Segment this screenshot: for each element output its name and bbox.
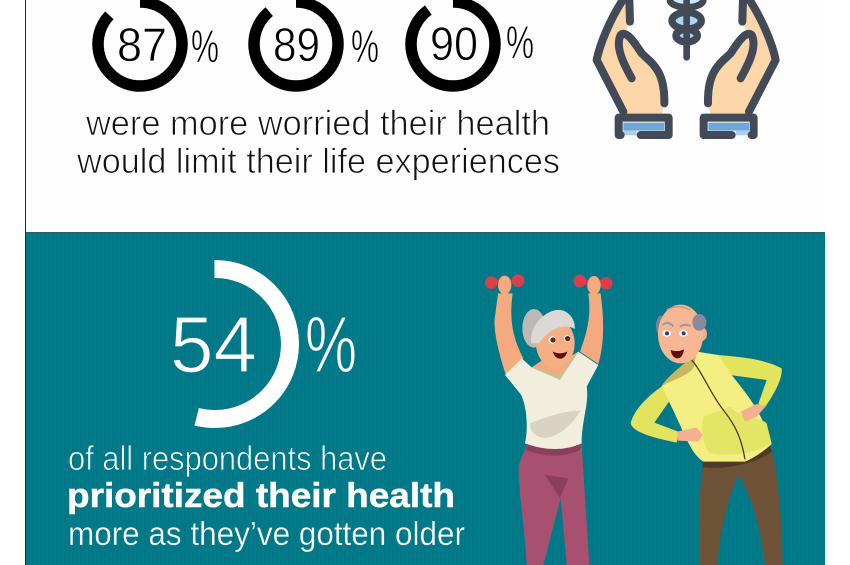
icon part: left hand [597,0,669,135]
shirt [505,352,598,449]
icon: hands protecting caduceus [597,0,776,135]
text: worried caption [76,104,560,181]
text: respondents caption: more as they’ve gotten older [68,515,465,552]
ring stat: 90 percent: % [506,16,534,68]
text: respondents caption: of all respondents have [68,440,387,478]
arms [494,293,523,375]
pants [519,445,589,565]
text: worried caption: were more worried their health [85,104,550,143]
hands [677,427,703,442]
head [656,305,707,363]
icon part: caduceus [670,0,703,57]
text: worried caption: would limit their life experiences [76,142,560,181]
ring stat: 90 percent [411,2,534,86]
neck [532,352,578,378]
ring stat: 87 percent: % [191,20,219,72]
dumbbells [485,274,613,295]
left sleeve [631,383,678,443]
ring stat: 90 percent: 90 [430,17,478,70]
ring stat: 54 percent [140,269,357,419]
ring stat: 89 percent [254,2,379,86]
text: respondents caption: prioritized their health [67,477,455,515]
ring stat: 89 percent: % [351,20,379,72]
ring stat: 54 percent: % [305,300,357,389]
icon part: right hand [704,0,776,135]
head [522,309,575,368]
jacket [662,352,772,462]
text: respondents caption [67,440,465,552]
ring stat: 89 percent: 89 [273,18,320,71]
right sleeve [718,355,782,407]
ring stat: 87 percent: 87 [117,18,167,71]
ring stat: 54 percent: 54 [170,300,257,389]
panel: prioritized health [26,232,825,565]
trousers [699,448,783,565]
illustration: man with hands on hips [631,305,783,565]
ring stat: 87 percent [98,2,219,86]
illustration: woman lifting dumbbells [485,274,613,565]
